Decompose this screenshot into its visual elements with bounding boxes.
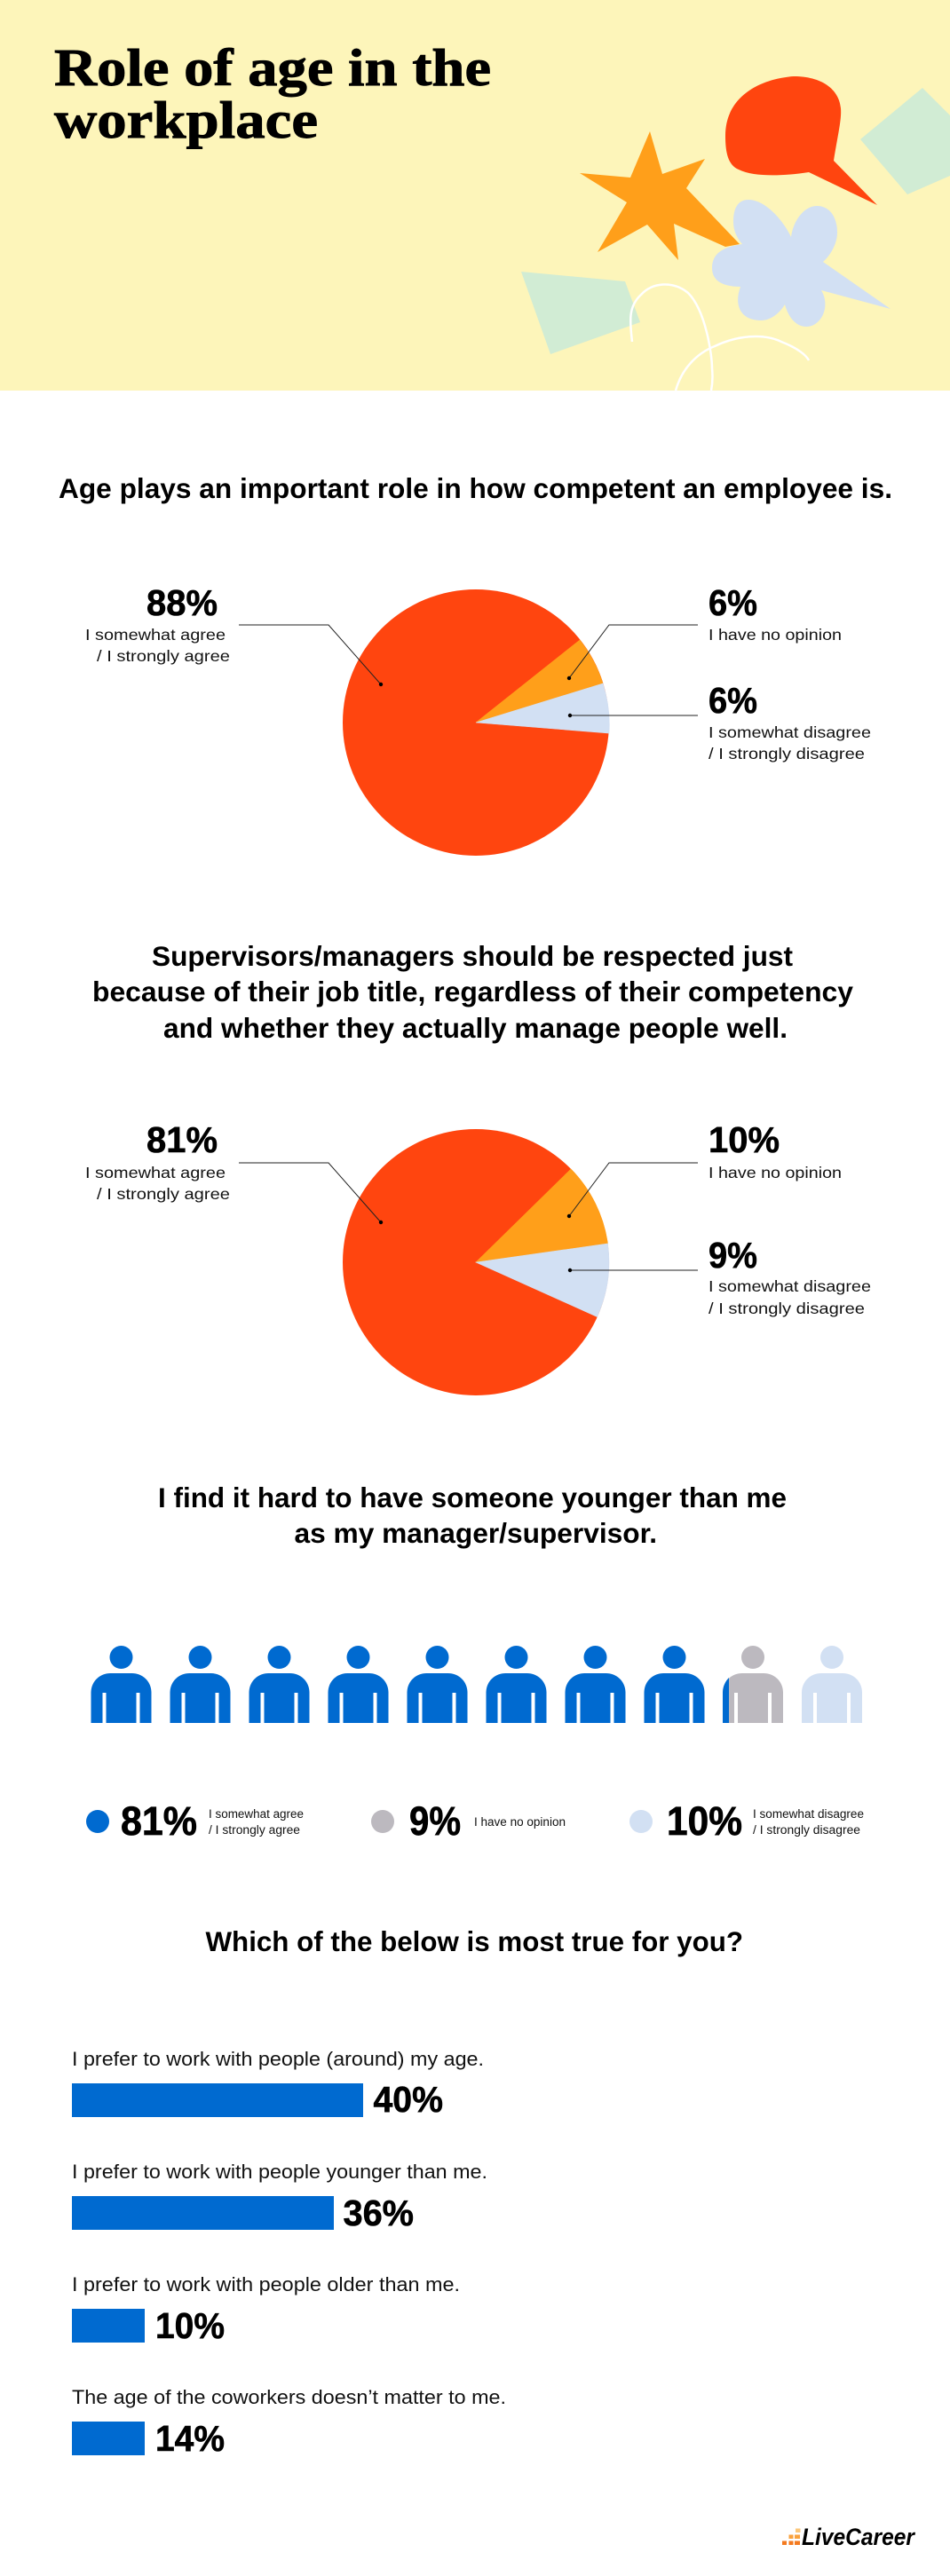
icon: person 2 — [170, 1646, 231, 1723]
icon: person 10 — [802, 1646, 862, 1723]
legend: 10% disagree: 10% — [667, 1798, 742, 1844]
heading: question 2 — [92, 940, 853, 1044]
icon: white curved lines — [630, 284, 809, 391]
title — [54, 38, 491, 149]
legend: 81% agree: / I strongly agree — [209, 1823, 300, 1837]
icon: orange star — [580, 131, 740, 260]
callout: 88% agree — [85, 582, 383, 686]
bar row: younger: I prefer to work with people younger than me. — [72, 2161, 487, 2183]
callout: 88% agree: / I strongly agree — [97, 647, 230, 665]
icon: person 5 — [407, 1646, 467, 1723]
legend: 81% agree: I somewhat agree — [209, 1807, 304, 1821]
icon: person 3 — [249, 1646, 309, 1723]
title: workplace — [54, 91, 318, 149]
legend: 81% agree: 81% — [121, 1798, 197, 1844]
legend: 81% agree — [86, 1798, 304, 1844]
panel: header — [0, 0, 950, 391]
pie chart 2 — [343, 1129, 609, 1395]
heading: question 3 — [158, 1482, 787, 1549]
icon: green shape left — [521, 272, 640, 354]
heading: question 3: I find it hard to have someone younger than me — [158, 1482, 787, 1513]
bar row: older: I prefer to work with people older than me. — [72, 2273, 460, 2295]
icon: person 8 — [645, 1646, 705, 1723]
callout: 9% disagree: / I strongly disagree — [709, 1300, 865, 1317]
legend: 9% no opinion — [371, 1798, 566, 1844]
heading: question 2: Supervisors/managers should be respected just — [152, 940, 793, 972]
bar row: does not matter — [72, 2386, 506, 2459]
callout: 6% no opinion: 6% — [709, 582, 757, 623]
legend: 10% disagree: I somewhat disagree — [753, 1807, 864, 1821]
icon: person 6 — [487, 1646, 547, 1723]
legend: 10% disagree — [629, 1798, 864, 1844]
bar row: does not matter: The age of the coworkers doesn’t matter to me. — [72, 2386, 506, 2408]
callout: 88% agree: I somewhat agree — [85, 626, 226, 644]
heading: question 3: as my manager/supervisor. — [295, 1517, 657, 1549]
bar row: does not matter: 14% — [155, 2418, 225, 2459]
icon: person 7 — [565, 1646, 625, 1723]
callout: 10% no opinion — [567, 1119, 842, 1218]
icon: logo squares — [782, 2528, 801, 2545]
legend: 10% disagree: / I strongly disagree — [753, 1823, 860, 1837]
callout: 6% disagree: I somewhat disagree — [709, 723, 871, 741]
icon: person 4 — [329, 1646, 389, 1723]
legend: 9% no opinion: 9% — [409, 1798, 461, 1844]
bar row: older: 10% — [155, 2305, 225, 2346]
pie chart 1 — [343, 589, 609, 856]
title: Role of age in the — [54, 38, 491, 97]
bar row: around my age: I prefer to work with people (around) my age. — [72, 2048, 484, 2070]
heading: question 2: and whether they actually manage people well. — [163, 1012, 788, 1044]
callout: 81% agree: 81% — [146, 1119, 218, 1160]
callout: 9% disagree — [568, 1235, 871, 1317]
bar row: younger — [72, 2161, 487, 2233]
callout: 6% no opinion — [567, 582, 842, 680]
icon: red speech bubble — [725, 76, 877, 205]
callout: 81% agree: / I strongly agree — [97, 1185, 230, 1203]
bar row: around my age — [72, 2048, 484, 2120]
heading: question 1: Age plays an important role in how competent an employee is. — [59, 472, 892, 504]
icon: green shape right — [860, 88, 950, 194]
bar row: older — [72, 2273, 460, 2346]
heading: question 2: because of their job title, regardless of their competency — [92, 976, 853, 1007]
callout: 10% no opinion: 10% — [709, 1119, 780, 1160]
callout: 81% agree — [85, 1119, 383, 1224]
bar chart — [72, 2048, 506, 2459]
bar row: younger: 36% — [343, 2193, 414, 2233]
callout: 9% disagree: I somewhat disagree — [709, 1277, 871, 1295]
callout: 6% disagree: / I strongly disagree — [709, 745, 865, 763]
callout: 9% disagree: 9% — [709, 1235, 757, 1276]
heading: question 4: Which of the below is most true for you? — [206, 1925, 743, 1957]
icon: blue flower — [712, 200, 891, 327]
callout: 88% agree: 88% — [146, 582, 218, 623]
pictogram: ten people — [91, 1646, 862, 1723]
callout: 6% no opinion: I have no opinion — [709, 626, 842, 644]
callout: 6% disagree: 6% — [709, 680, 757, 721]
callout: 81% agree: I somewhat agree — [85, 1164, 226, 1181]
logo: LiveCareer: LiveCareer — [802, 2524, 915, 2550]
icon: person 9 partly blue, mostly grey — [723, 1646, 783, 1723]
legend: 9% no opinion: I have no opinion — [474, 1815, 566, 1829]
icon: person 1 — [91, 1646, 151, 1723]
bar row: around my age: 40% — [373, 2079, 443, 2120]
callout: 10% no opinion: I have no opinion — [709, 1164, 842, 1181]
callout: 6% disagree — [568, 680, 871, 763]
